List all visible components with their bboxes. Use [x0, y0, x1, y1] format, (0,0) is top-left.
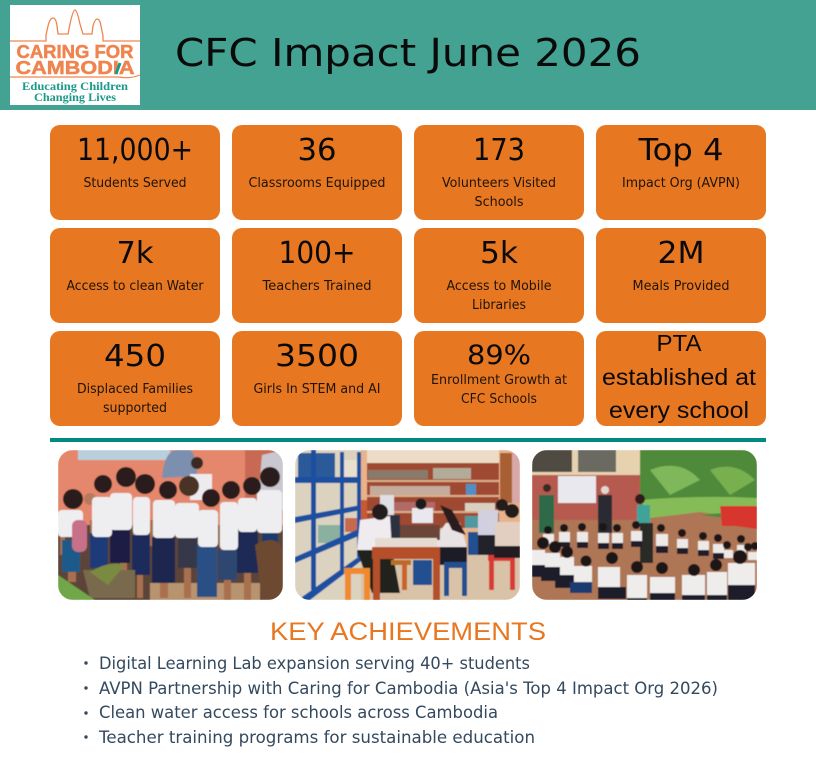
card: students served	[50, 125, 220, 220]
card: girls in stem: Girls In STEM and AI	[254, 382, 380, 397]
card: enrollment growth: 89%	[467, 340, 531, 371]
card: students served: Students Served	[84, 176, 186, 191]
card: classrooms equipped: Classrooms Equipped	[248, 176, 386, 191]
card: top 4	[596, 125, 766, 220]
photo: library	[295, 450, 520, 600]
card: enrollment growth: Enrollment Growth at	[431, 373, 567, 388]
card: volunteers	[414, 125, 584, 220]
card: teachers trained	[232, 228, 402, 323]
card: mobile libraries: 5k	[480, 236, 519, 271]
logo	[10, 5, 140, 105]
achievements list: Digital Learning Lab expansion serving 40+ students	[99, 654, 530, 674]
logo: Changing Lives	[34, 90, 116, 104]
card: meals	[596, 228, 766, 323]
card: clean water	[50, 228, 220, 323]
achievements list	[84, 654, 718, 748]
card: classrooms equipped	[232, 125, 402, 220]
card: teachers trained: Teachers Trained	[261, 279, 372, 294]
card: top 4: Impact Org (AVPN)	[622, 176, 740, 191]
photo: children lined up	[58, 450, 283, 600]
card: classrooms equipped: 36	[298, 133, 336, 168]
title: CFC Impact June 2026	[175, 31, 641, 75]
card: displaced families: supported	[103, 401, 167, 416]
card: clean water: 7k	[116, 236, 154, 271]
stat cards	[50, 125, 766, 426]
achievements list: AVPN Partnership with Caring for Cambodia (Asia's Top 4 Impact Org 2026)	[99, 679, 718, 699]
heading: key achievements: KEY ACHIEVEMENTS	[270, 618, 546, 646]
card: volunteers: Volunteers Visited	[442, 176, 556, 191]
card: top 4: Top 4	[637, 133, 724, 168]
card: teachers trained: 100+	[278, 236, 356, 271]
card: volunteers: Schools	[474, 195, 524, 210]
card: pta	[596, 330, 766, 426]
card: enrollment growth	[414, 331, 584, 426]
logo: CARING FOR	[16, 42, 134, 62]
card: displaced families	[50, 331, 220, 426]
card: students served: 11,000+	[77, 133, 193, 168]
card: clean water: Access to clean Water	[66, 279, 204, 294]
achievements list: Clean water access for schools across Cambodia	[99, 703, 498, 723]
card: pta: established at	[602, 364, 757, 390]
card: meals: 2M	[658, 236, 704, 271]
card: girls in stem: 3500	[275, 339, 359, 374]
card: displaced families: Displaced Families	[77, 382, 193, 397]
card: enrollment growth: CFC Schools	[461, 392, 537, 407]
card: mobile libraries	[414, 228, 584, 323]
achievements list: Teacher training programs for sustainable education	[98, 728, 535, 748]
card: meals: Meals Provided	[632, 279, 730, 294]
card: volunteers: 173	[473, 133, 525, 168]
photo: students in a circle outdoors	[532, 450, 759, 600]
card: girls in stem	[232, 331, 402, 426]
logo: CAMBODIA	[16, 58, 134, 78]
card: mobile libraries: Libraries	[472, 298, 526, 313]
logo: Educating Children	[22, 79, 128, 93]
card: displaced families: 450	[104, 339, 166, 374]
card: pta: every school	[609, 397, 749, 423]
header band	[0, 0, 816, 110]
card: pta: PTA	[656, 330, 702, 356]
card: mobile libraries: Access to Mobile	[446, 279, 552, 294]
